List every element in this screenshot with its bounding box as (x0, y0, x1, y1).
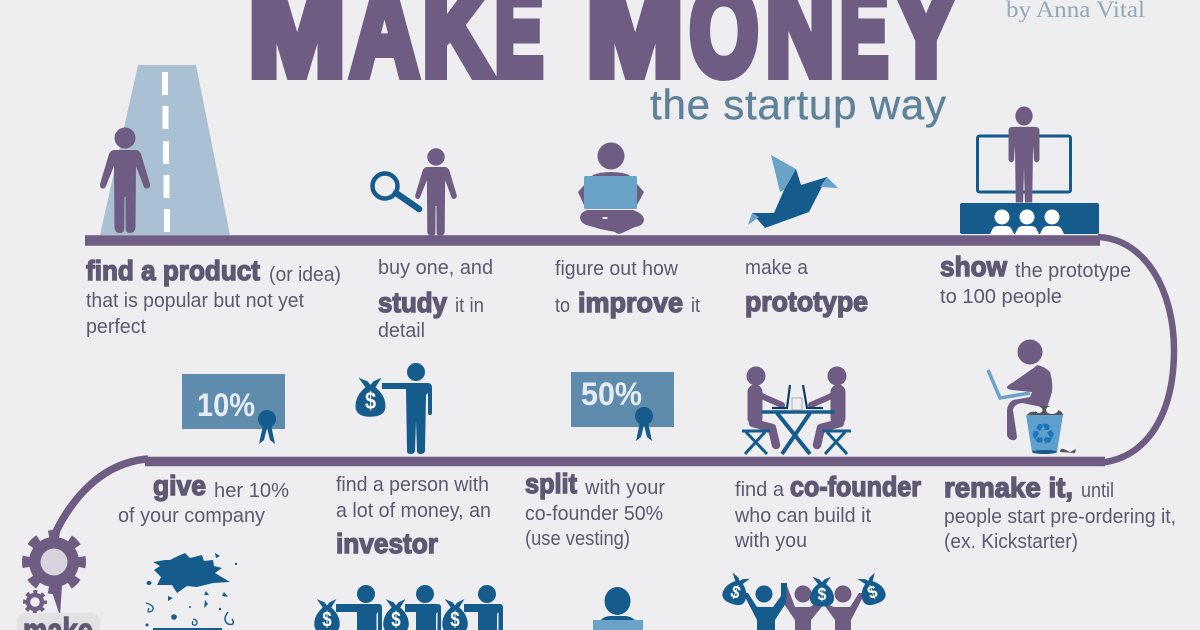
caption: investor (336, 474, 491, 559)
caption: study: buy one, and (378, 257, 493, 279)
icon: screen (978, 136, 1070, 192)
icon: presenter (1009, 106, 1039, 202)
caption: split: (use vesting) (525, 528, 630, 550)
caption: remake it: until (1081, 480, 1114, 502)
caption: find a product (86, 255, 341, 338)
caption: give: give (153, 470, 206, 501)
caption: improve: it (691, 295, 700, 317)
step: study (372, 148, 493, 342)
step: show (940, 106, 1131, 308)
caption: show: to 100 people (940, 286, 1062, 308)
icon: person on recycling bin (988, 340, 1076, 454)
icon: three people raising money bags (720, 572, 888, 630)
step: find a product (86, 65, 341, 338)
caption: improve: figure out how (555, 258, 679, 280)
step: remake it (944, 340, 1176, 553)
icon: origami bird (748, 155, 838, 228)
icon: 50% certificate: 50% (581, 376, 642, 412)
icon: investor holding money bag (356, 363, 432, 454)
step: give (118, 374, 289, 527)
caption: co-founder (734, 471, 921, 552)
icon: three people raising money bags: $ (728, 581, 744, 603)
icon: 10% certificate: 10% (197, 387, 255, 423)
caption: study (378, 257, 493, 342)
step: investor (336, 363, 491, 559)
icon: person (100, 128, 150, 233)
caption: show: show (940, 251, 1007, 282)
caption: improve (555, 258, 700, 318)
caption: split: split (525, 468, 577, 499)
caption: remake it (944, 472, 1176, 553)
icon: small gear (25, 592, 45, 612)
icon: road (100, 65, 230, 235)
icon: confetti burst (146, 553, 237, 630)
caption: find a product: (or idea) (269, 264, 341, 286)
caption: show: the prototype (1015, 260, 1131, 282)
subtitle: the startup way (650, 81, 946, 128)
icon: stage and audience (960, 203, 1099, 234)
icon: three people raising money bags: $ (818, 584, 827, 604)
caption: split: co-founder 50% (525, 503, 663, 525)
icon: two founders at a table (742, 366, 851, 454)
caption: prototype (745, 257, 868, 317)
caption: give (118, 470, 289, 527)
icon: large gear (27, 535, 81, 616)
caption: remake it: people start pre-ordering it, (944, 506, 1176, 528)
icon: investor holding money bag: $ (365, 387, 376, 414)
caption: show (940, 251, 1131, 308)
step: improve (555, 142, 700, 318)
caption: improve: to (555, 295, 570, 317)
caption: split: with your (584, 477, 665, 499)
caption: study: detail (378, 320, 425, 342)
caption: investor: find a person with (336, 474, 489, 496)
step: prototype (745, 155, 868, 317)
caption: investor: investor (336, 528, 438, 559)
icon: 10% certificate (182, 374, 285, 444)
caption: co-founder: who can build it (734, 505, 871, 527)
caption: study: study (378, 287, 447, 318)
caption: investor: a lot of money, an (336, 500, 491, 522)
caption: remake it: remake it, (944, 472, 1073, 503)
path line (52, 237, 1174, 540)
icon: person on recycling bin: ♻ (1030, 417, 1056, 451)
caption: study: it in (455, 295, 484, 317)
step: co-founder (734, 366, 921, 552)
caption: split (525, 468, 665, 550)
caption: give: of your company (118, 505, 265, 527)
icon: person with laptop (578, 142, 644, 234)
caption: co-founder: find a (735, 479, 785, 501)
caption: co-founder: co-founder (790, 471, 921, 502)
caption: find a product: that is popular but not yet (86, 290, 304, 312)
icon: person (415, 148, 457, 236)
icon: 50% certificate (571, 372, 674, 441)
icon: person at laptop, bottom (593, 587, 643, 630)
caption: give: her 10% (214, 480, 289, 502)
caption: co-founder: with you (734, 530, 807, 552)
caption: prototype: prototype (745, 286, 868, 317)
icon: three people raising money bags: $ (865, 581, 881, 603)
caption: prototype: make a (745, 257, 809, 279)
caption: find a product: find a product (86, 255, 260, 286)
icon: magnifier (372, 174, 419, 209)
caption: find a product: perfect (86, 316, 146, 338)
step: split equity (525, 372, 674, 550)
icon: three investors with money bags (314, 585, 503, 630)
caption: remake it: (ex. Kickstarter) (944, 531, 1078, 553)
caption: improve: improve (578, 287, 683, 318)
